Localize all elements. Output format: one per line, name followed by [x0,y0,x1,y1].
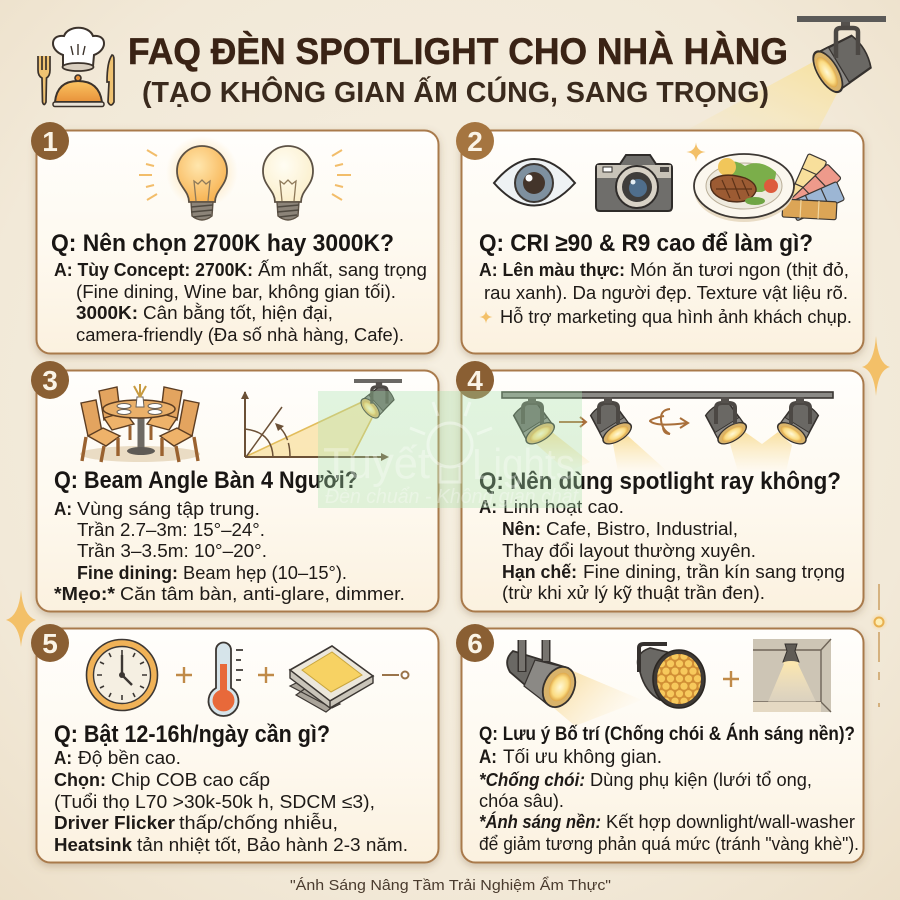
watermark: Tuyết Lights [318,391,582,508]
answer [54,259,427,345]
answer: Tối ưu không gian. [503,747,662,768]
answer: Cafe, Bistro, Industrial, [546,519,738,539]
answer: A: [54,748,72,768]
answer: Chip COB cao cấp [111,770,270,790]
question: Q: Nên dùng spotlight ray không? [479,468,841,495]
answer: Món ăn tươi ngon (thịt đỏ, [630,260,849,280]
answer: *Chống chói: [479,770,585,790]
answer: Fine dining, trần kín sang trọng [583,562,845,582]
number badge 6: 6 [467,628,483,659]
answer: thấp/chống nhiễu, [179,812,338,833]
icon: eye [494,159,575,206]
icon: ceiling spotlight with beam [683,16,886,132]
panel card [462,628,864,862]
answer: Ấm nhất, sang trọng [258,259,427,280]
answer: 3000K: [76,303,138,323]
icon: spotlight with beam [507,640,642,726]
plus sign [723,671,739,687]
spotlight 4 [774,397,822,448]
number badge 4 [456,361,494,399]
spotlight 2 [587,397,635,448]
spotlight 3 [702,397,750,448]
chart: beam angle diagram [241,379,402,461]
icon: thermometer [208,643,243,716]
icon: knife [107,55,114,105]
decorative sparkles [6,336,890,707]
answer: Linh hoạt cao. [503,497,624,517]
answer: Kết hợp downlight/wall-washer [606,812,855,832]
panel 4: track spotlight [456,361,864,612]
sparkle: right orb [870,584,888,707]
icon: sparkle [686,142,706,162]
answer: Chọn: [54,770,106,790]
light beam [683,62,840,132]
icon: LED chip [290,646,373,712]
question: Q: Bật 12-16h/ngày cần gì? [54,721,330,748]
icon: dining table with four chairs [80,384,200,462]
answer: (Tuổi thọ L70 >30k-50k h, SDCM ≤3), [54,792,375,812]
panel card [462,370,864,612]
panel card [36,628,438,862]
answer: Fine dining: [77,563,178,583]
watermark name: Tuyết [323,439,430,488]
answer: Hỗ trợ marketing qua hình ảnh khách chụp. [500,306,852,327]
icon: track rail with four spotlights [502,392,833,472]
question: Q: Nên chọn 2700K hay 3000K? [51,230,394,257]
answer: Trần 2.7–3m: 15°–24°. [77,520,265,540]
answer: camera-friendly (Đa số nhà hàng, Cafe). [76,325,404,345]
question: Q: Beam Angle Bàn 4 Người? [54,467,358,494]
icon: fork [38,56,50,104]
answer: Độ bền cao. [78,748,181,768]
answer: Hạn chế: [502,562,577,582]
number badge 1 [31,122,69,160]
answer: tản nhiệt tốt, Bảo hành 2-3 năm. [137,835,408,855]
number badge 2: 2 [467,126,483,157]
arrow [559,417,586,427]
answer: A: [54,499,72,519]
answer: rau xanh). Da người đẹp. Texture vật liệu rõ. [484,283,848,303]
answer: để giảm tương phản quá mức (tránh "vàng khè"). [479,834,859,854]
answer [479,747,859,854]
answer: *Mẹo:* [54,584,115,604]
answer [479,497,845,603]
answer [479,260,852,327]
number badge 2 [456,122,494,160]
number badge 3: 3 [42,365,58,396]
answer: Vùng sáng tập trung. [77,499,260,519]
answer: *Ánh sáng nền: [479,811,601,832]
icon: chef hat [53,28,104,71]
track rail [502,392,833,398]
answer: A: [479,747,497,768]
answer: (Fine dining, Wine bar, không gian tối). [76,282,396,302]
watermark name [323,439,575,489]
answer: chóa sâu). [479,791,564,811]
icon: neutral bulb 3000K [263,146,351,220]
question: Q: CRI ≥90 & R9 cao để làm gì? [479,230,813,257]
track rail [797,16,886,22]
watermark name: Lights [472,440,575,489]
title line 2: (TẠO KHÔNG GIAN ẤM CÚNG, SANG TRỌNG) [142,75,769,109]
answer: A: Lên màu thực: [479,260,625,280]
number badge 5: 5 [42,628,58,659]
watermark slogan: Đèn chuẩn - Không gian chất [325,486,579,508]
answer: Nên: [502,519,541,539]
icon: clock [86,640,158,710]
icon: camera [596,155,672,211]
answer: Beam hẹp (10–15°). [183,563,347,583]
answer: A: Tùy Concept: 2700K: [54,260,253,280]
panel card [36,130,438,354]
title [128,31,788,109]
icon: room with downlight [753,639,831,712]
number badge 6 [456,624,494,662]
panel card [36,370,438,612]
answer: Căn tâm bàn, anti-glare, dimmer. [120,584,405,604]
answer: Driver Flicker [54,813,175,833]
number badge 1: 1 [42,126,58,157]
icon: rotate symbol [650,409,688,434]
panel 6: placement [456,624,864,862]
answer: Cân bằng tốt, hiện đại, [143,302,333,323]
answer: Trần 3–3.5m: 10°–20°. [77,541,267,561]
answer [54,499,405,604]
answer: A: [479,497,497,517]
panel 3: beam angle [31,361,438,612]
footer quote: "Ánh Sáng Nâng Tầm Trải Nghiệm Ẩm Thực" [290,876,611,894]
number badge 4: 4 [467,365,483,396]
connector [382,672,408,678]
answer: (trừ khi xử lý kỹ thuật trần đen). [502,583,765,603]
number badge 5 [31,624,69,662]
answer [54,748,408,855]
panel card [462,130,864,354]
sparkle: right upper [862,336,890,396]
icon: colour swatch fan [782,154,845,221]
title line 1: FAQ ĐÈN SPOTLIGHT CHO NHÀ HÀNG [128,31,788,72]
icon: warm bulb 2700K [139,136,238,220]
lamp body [808,22,876,96]
answer: Thay đổi layout thường xuyên. [502,541,756,561]
number badge 3 [31,361,69,399]
panel 5: lifetime [31,624,438,862]
answer: Heatsink [54,835,133,855]
plus sign [176,667,192,683]
plus sign [258,667,274,683]
icon: plate of steak and salad [694,154,794,222]
watermark box [318,391,582,508]
panel 1: colour temperature [31,122,438,354]
watermark bulb [410,402,492,482]
sparkle: left [6,590,36,647]
answer: Dùng phụ kiện (lưới tổ ong, [590,770,812,790]
icon: cloche [53,75,104,106]
panel 2: CRI [456,122,864,354]
spotlight 1 [510,397,558,448]
icon: chef hat, cloche and cutlery [38,28,114,106]
icon: honeycomb spotlight [638,644,705,708]
question: Q: Lưu ý Bố trí (Chống chói & Ánh sáng nền)? [479,723,855,745]
